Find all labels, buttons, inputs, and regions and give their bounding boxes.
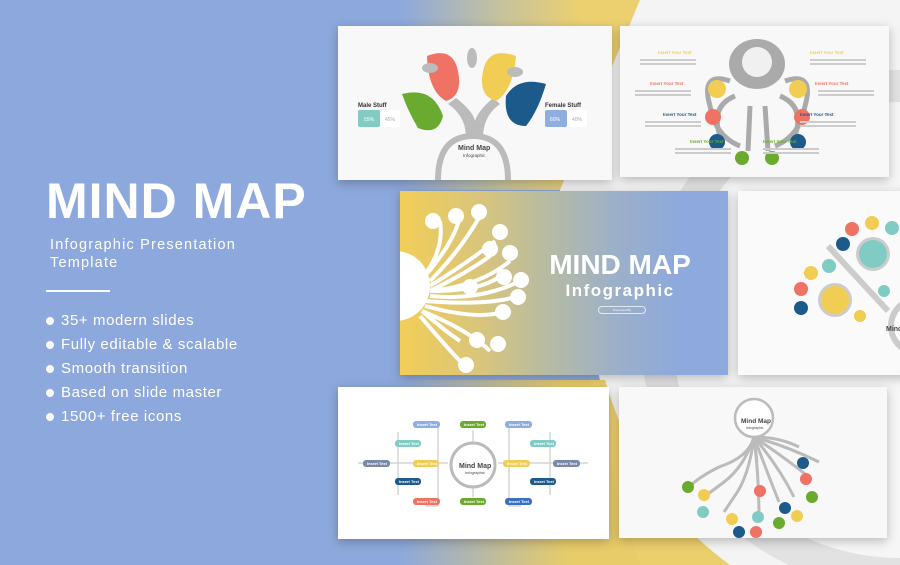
subtitle bbox=[50, 237, 236, 271]
cover title: MIND MAP bbox=[549, 249, 691, 280]
slide: octopus: Insert Your Text bbox=[663, 112, 697, 117]
slide: octopus: Insert Your Text bbox=[800, 112, 834, 117]
slide: mind map boxes: Insert Text bbox=[464, 422, 485, 427]
slide: cover: Presented By bbox=[613, 308, 631, 312]
slide: roots bbox=[619, 387, 887, 538]
slide: mind map boxes: Insert Text bbox=[367, 461, 388, 466]
slide: mind map boxes: Insert Text bbox=[417, 422, 438, 427]
slide: octopus: Insert Your Text bbox=[815, 81, 849, 86]
slide: roots: Infographic bbox=[746, 426, 764, 430]
slide: mind map boxes: Insert Text bbox=[417, 499, 438, 504]
slide: tree leaves: 60% bbox=[550, 117, 561, 123]
slide: tree leaves: Female Stuff bbox=[545, 103, 582, 109]
slide: cover: Infographic bbox=[565, 281, 675, 300]
slide: octopus: Insert Your Text bbox=[810, 50, 844, 55]
feature list bbox=[46, 312, 238, 425]
slide: octopus bbox=[620, 26, 889, 177]
feature list: 35+ modern slides bbox=[61, 312, 194, 329]
slide: mind map boxes: Insert Text bbox=[557, 461, 578, 466]
slide: mind map boxes bbox=[338, 387, 609, 539]
slide: mind map boxes: Insert Text bbox=[464, 499, 485, 504]
subtitle: Infographic Presentation bbox=[50, 237, 236, 253]
slide: octopus: Insert Your Text bbox=[763, 139, 797, 144]
slide: tree leaves: 45% bbox=[385, 117, 396, 123]
slide: tree leaves: Infographic bbox=[463, 153, 486, 158]
slide: octopus: Insert Your Text bbox=[650, 81, 684, 86]
slide: bubbles bbox=[738, 191, 900, 375]
slide: mind map boxes: Insert Text bbox=[534, 479, 555, 484]
slide: mind map boxes: Insert Text bbox=[509, 422, 530, 427]
slide: mind map boxes: Insert Text bbox=[509, 499, 530, 504]
slide: octopus: Insert Your Text bbox=[658, 50, 692, 55]
slide: octopus: Insert Your Text bbox=[690, 139, 724, 144]
slide: cover bbox=[400, 191, 728, 375]
feature list: Based on slide master bbox=[61, 384, 222, 401]
slide: tree leaves: Mind Map bbox=[458, 145, 490, 152]
slide: mind map boxes: Insert Text bbox=[399, 441, 420, 446]
subtitle: Template bbox=[50, 255, 118, 271]
slide: mind map boxes: Mind Map bbox=[459, 463, 491, 470]
feature list: Smooth transition bbox=[61, 360, 188, 377]
slide: tree leaves: 55% bbox=[364, 117, 375, 123]
feature list: 1500+ free icons bbox=[61, 408, 182, 425]
feature list: Fully editable & scalable bbox=[61, 336, 238, 353]
title: MIND MAP bbox=[46, 173, 307, 229]
slide: tree leaves bbox=[338, 26, 612, 180]
slide: mind map boxes: Insert Text bbox=[417, 461, 438, 466]
slide: tree leaves: Male Stuff bbox=[358, 103, 388, 109]
slide: mind map boxes: Insert Text bbox=[507, 461, 528, 466]
slide: roots: Mind Map bbox=[741, 418, 771, 425]
slide: tree leaves: 40% bbox=[572, 117, 583, 123]
slide: mind map boxes: Infographic bbox=[465, 470, 485, 475]
slide: mind map boxes: Insert Text bbox=[534, 441, 555, 446]
slide: mind map boxes: Insert Text bbox=[399, 479, 420, 484]
